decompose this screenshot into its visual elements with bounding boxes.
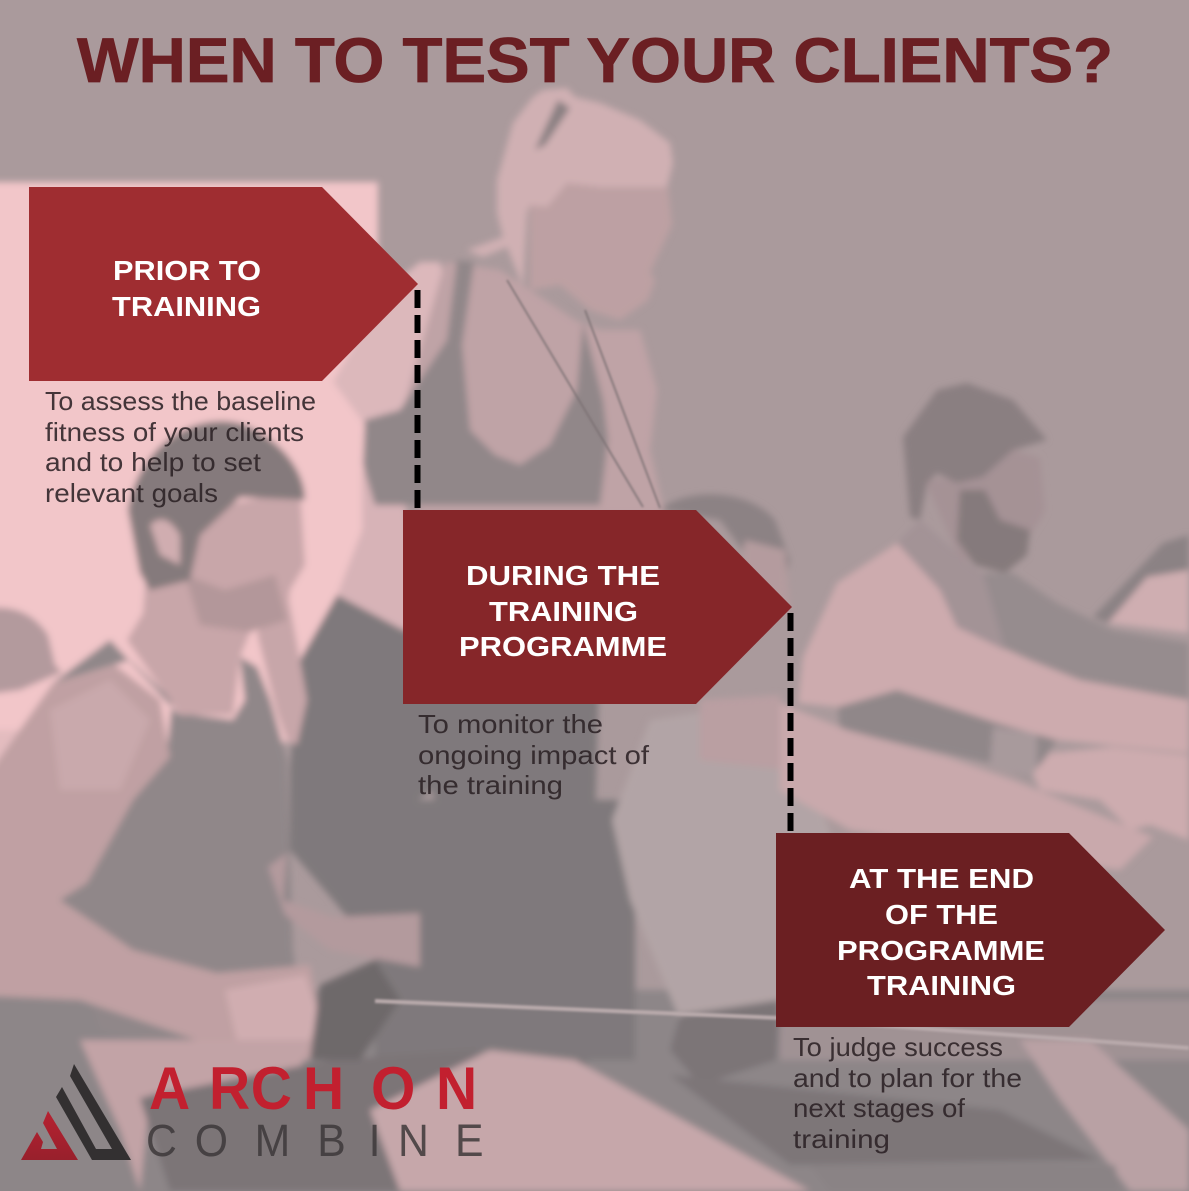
text: step 3 description: training	[793, 1124, 890, 1154]
man right: shoulder strap	[897, 520, 1005, 650]
step 3: at the end of the programme training: AT THE END	[849, 863, 1034, 894]
woman: midriff	[337, 470, 420, 640]
woman: hand on shoulder	[257, 590, 307, 745]
man right: head	[925, 450, 1045, 560]
seated woman	[660, 494, 790, 600]
text: step 1 description: and to help to set	[45, 447, 262, 477]
text: step 2 description: To monitor the	[418, 709, 603, 739]
title: WHEN TO TEST YOUR CLIENTS?	[77, 26, 1113, 96]
step 2: during the training programme: PROGRAMME	[459, 631, 667, 662]
man right: torso	[838, 690, 1057, 780]
front man: hand	[268, 853, 420, 967]
step 1: prior to training: TRAINING	[112, 291, 261, 322]
front man: neck and face	[127, 490, 305, 715]
step 1: prior to training	[29, 187, 418, 381]
rowing chain	[375, 1001, 1189, 1048]
step 1: prior to training: PRIOR TO	[113, 255, 261, 286]
text: step 3 description: To judge success	[793, 1032, 1003, 1062]
step 3: at the end of the programme training: OF THE	[885, 899, 998, 930]
text: step 1 description: fitness of your clients	[45, 417, 304, 447]
step 2: during the training programme	[403, 510, 792, 704]
text: step 2 description: ongoing impact of	[418, 740, 650, 770]
lower body and rower	[80, 1040, 310, 1191]
step 3: at the end of the programme training: TRAINING	[867, 970, 1016, 1001]
text: step 3 description: next stages of	[793, 1093, 966, 1123]
woman: chest and neck	[400, 262, 665, 515]
text: step 1 description	[45, 386, 316, 508]
text: step 3 description	[793, 1032, 1022, 1154]
man right: near arm	[798, 543, 1189, 753]
text: step 1 description: relevant goals	[45, 478, 218, 508]
leggings	[290, 595, 600, 1065]
partner at far right	[1093, 535, 1189, 623]
woman: arm	[333, 262, 465, 430]
text: step 3 description: and to plan for the	[793, 1063, 1022, 1093]
icon: logo mark	[21, 1064, 131, 1160]
step 3: at the end of the programme training	[776, 833, 1165, 1027]
man right: knee	[1033, 747, 1189, 840]
wordmark: Combine: COMBINE	[146, 1116, 484, 1166]
seated woman arm	[780, 703, 1153, 870]
front man: tank	[53, 640, 300, 1060]
lanyard	[507, 280, 660, 508]
bra	[363, 260, 608, 505]
wordmark: Archon: ARCHON	[149, 1056, 477, 1122]
logo: Archon Combine	[21, 1056, 484, 1166]
step 3: at the end of the programme training: PROGRAMME	[837, 935, 1045, 966]
step 2: during the training programme: DURING THE	[466, 560, 660, 591]
man right: far arm	[957, 573, 1189, 710]
text: step 2 description: the training	[418, 770, 563, 800]
front man: shoulder and arm	[0, 665, 320, 1060]
dashed connector 2	[788, 613, 794, 833]
hair and face	[530, 183, 672, 320]
dashed connector 1	[414, 290, 420, 510]
background figure at left	[0, 608, 62, 695]
step 2: during the training programme: TRAINING	[489, 596, 638, 627]
text: step 2 description	[418, 709, 650, 800]
text: step 1 description: To assess the baseline	[45, 386, 316, 416]
